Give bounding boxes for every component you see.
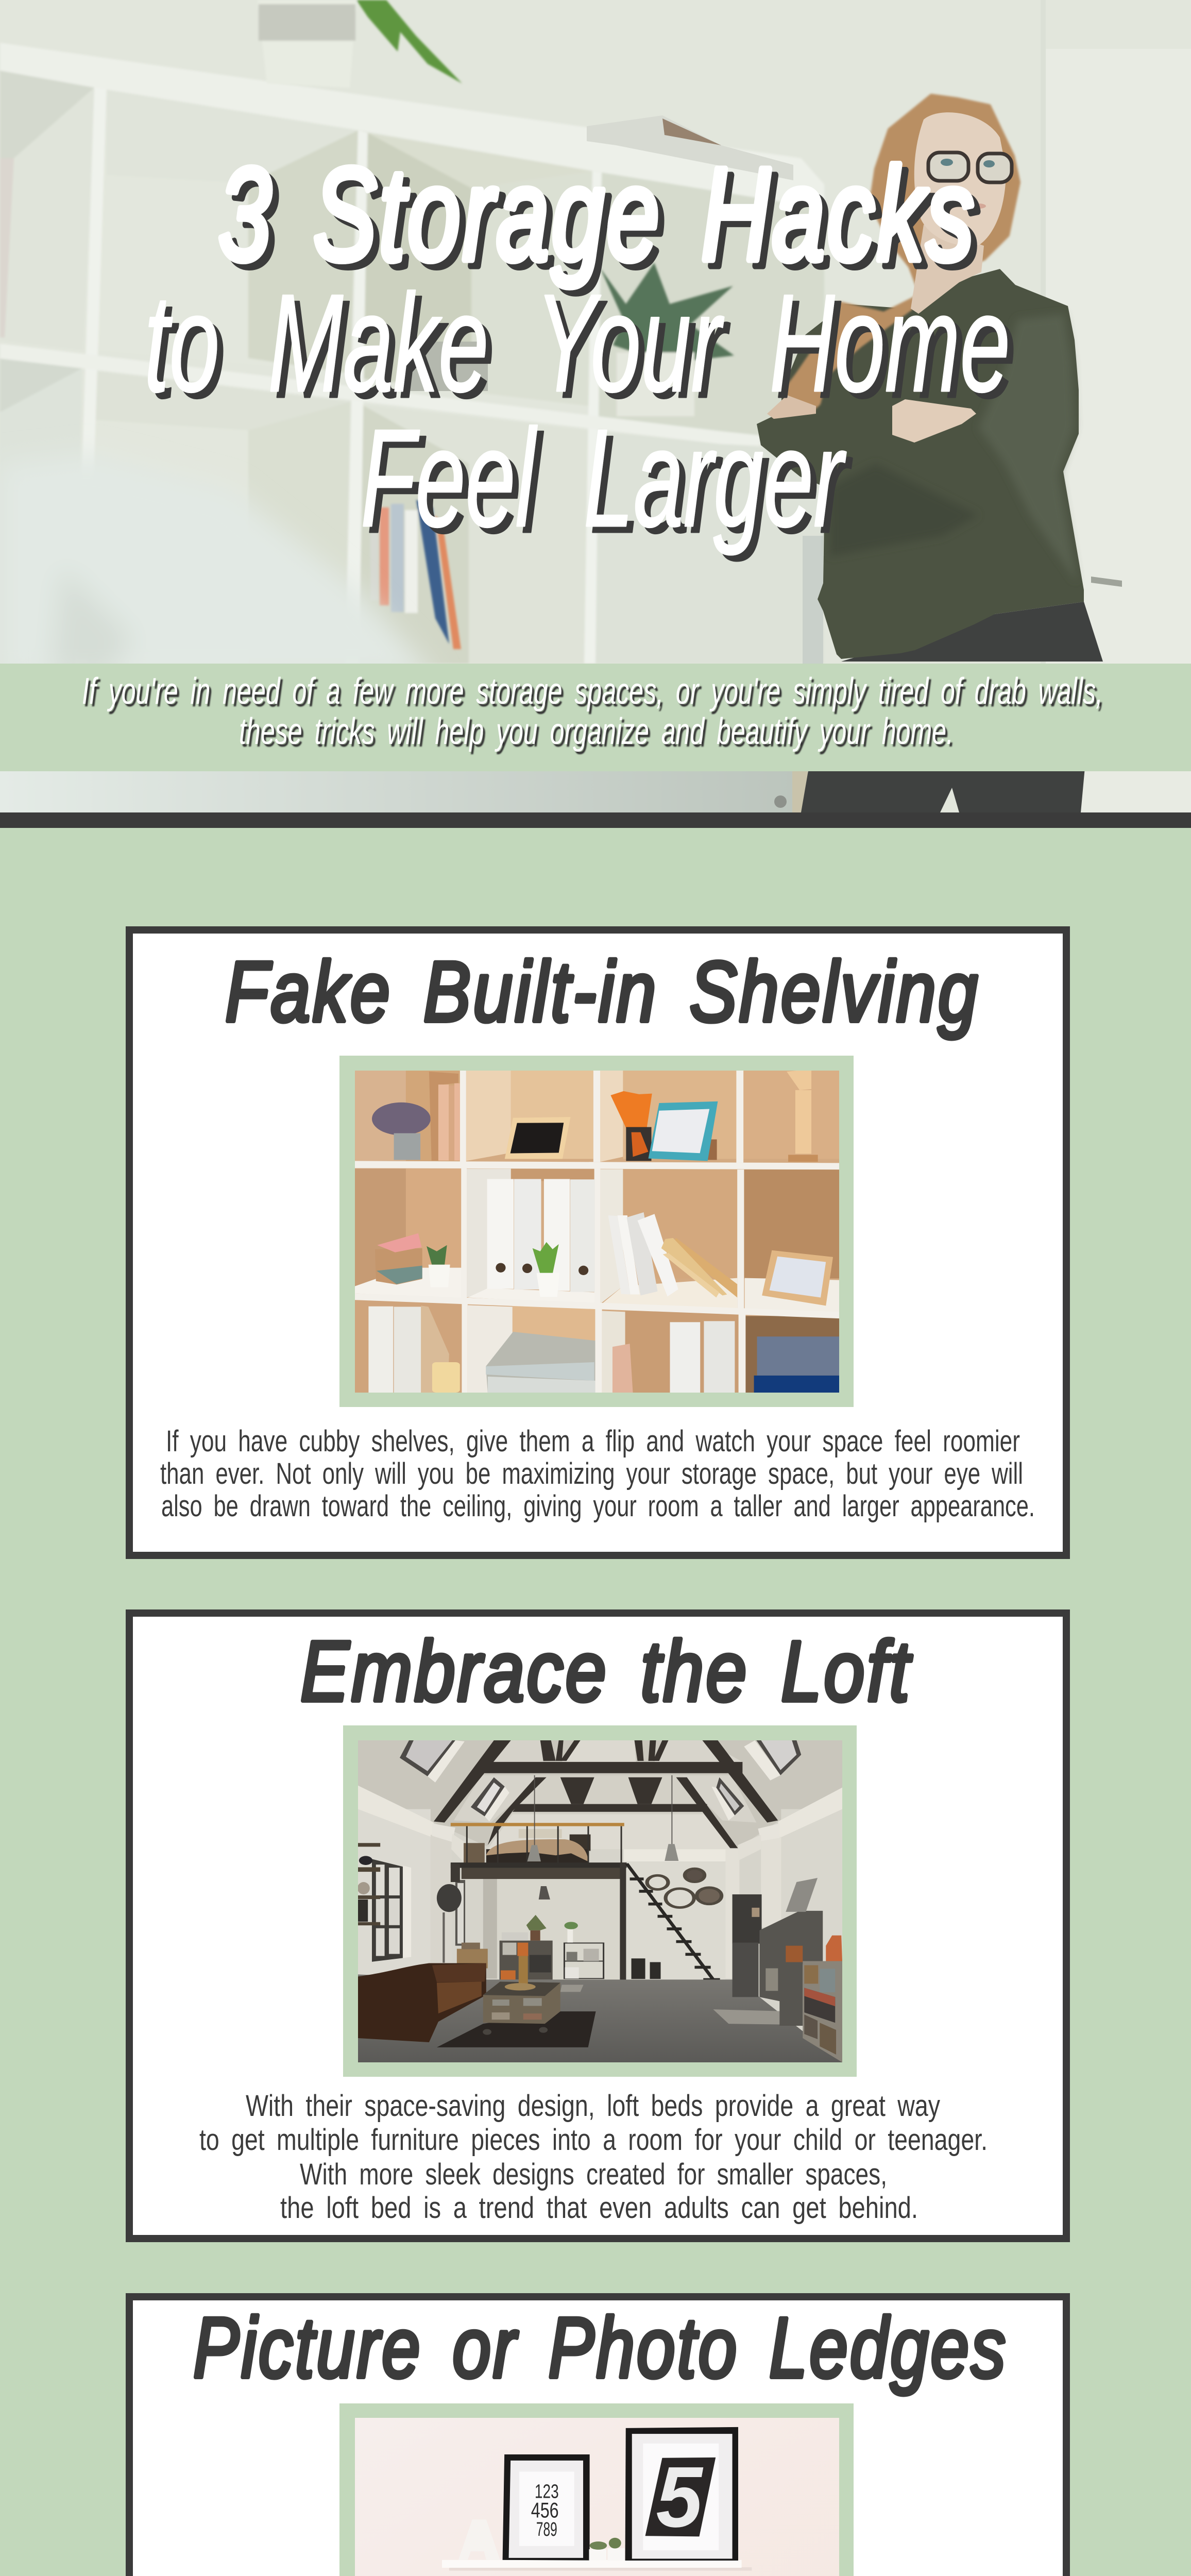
- panel: Picture or Photo Ledges: [129, 2297, 1066, 2576]
- body text: [160, 1425, 1035, 1523]
- upright books: [429, 1072, 460, 1161]
- body text: the loft bed is a trend that even adults can get behind.: [280, 2191, 918, 2225]
- frame with numbers: 123: [535, 2481, 559, 2502]
- intro band: [0, 664, 1191, 771]
- pallet table: [483, 1956, 560, 2035]
- frame with number 5: 5: [656, 2449, 704, 2545]
- sunlight on the floor: [560, 1985, 799, 2025]
- heading: Embrace the Loft: Embrace the Loft: [300, 1624, 912, 1719]
- left window: [372, 1859, 465, 1962]
- intro text: [82, 671, 1103, 752]
- pencil cup: [610, 1091, 652, 1161]
- lips: [972, 204, 986, 209]
- leather sofa: [358, 1963, 486, 2042]
- chalkboard frame: [505, 1117, 570, 1159]
- body text: With their space-saving design, loft beds provide a great way: [246, 2089, 940, 2123]
- main title: [144, 141, 1010, 556]
- white magazine files: [487, 1179, 595, 1297]
- skylights: [400, 1740, 801, 1821]
- photo frame: [339, 2403, 854, 2576]
- shirt: [757, 269, 1084, 659]
- studio lamp: [437, 1884, 462, 1963]
- frame with numbers: 789: [536, 2519, 557, 2540]
- ladder: [627, 1863, 724, 1994]
- blurred foreground foliage: [10, 459, 428, 664]
- face: [914, 112, 1006, 246]
- body text: With more sleek designs created for smaller spaces,: [300, 2158, 887, 2191]
- moulding and columns: [358, 1786, 842, 1978]
- hero photo: woman beside white shelving: [0, 0, 1191, 814]
- frame with numbers: [503, 2454, 590, 2561]
- shelving units: [457, 1915, 661, 1979]
- hanging lamps: [528, 1775, 678, 1900]
- grey box behind title: [400, 342, 488, 391]
- panel: Embrace the Loft: [129, 1613, 1066, 2239]
- rug: [437, 2011, 596, 2047]
- photo: cubby shelves: [355, 1071, 839, 1393]
- shelf boards: [355, 1071, 839, 1393]
- blue photo frame: [649, 1101, 718, 1161]
- panel: Fake Built-in Shelving: [129, 930, 1066, 1555]
- photo: loft interior: [358, 1740, 842, 2062]
- white and tan books: [608, 1212, 737, 1297]
- potted plant on the top shelf: [258, 0, 462, 88]
- main title: Feel Larger: [361, 401, 847, 556]
- lavender in a tin: [372, 1103, 431, 1160]
- neck and chest: [911, 225, 984, 314]
- photo: desk below photo ledge: [355, 2418, 839, 2576]
- body text: to get multiple furniture pieces into a room for your child or teenager.: [199, 2123, 988, 2157]
- wooden mannequin: [787, 1071, 818, 1162]
- boxes on the shelf: [587, 115, 793, 180]
- heading: Picture or Photo Ledges: Picture or Photo Ledges: [193, 2300, 1008, 2396]
- wall clocks: [647, 1869, 722, 1907]
- small plant: [427, 1245, 450, 1287]
- heading: Fake Built-in Shelving: Fake Built-in Shelving: [225, 944, 980, 1040]
- floor: [358, 1974, 842, 2062]
- roof beams: [434, 1740, 778, 1848]
- sticky-note holder: [375, 1233, 422, 1284]
- woman: [757, 96, 1103, 812]
- wooden picture frame: [762, 1250, 833, 1306]
- photo ledge: [442, 2560, 752, 2571]
- trunks of drawers: [803, 1961, 842, 2062]
- cacti: [589, 2538, 625, 2561]
- plant in shelf: [600, 263, 734, 416]
- trousers: [801, 602, 1103, 812]
- dark divider bar: [0, 812, 1191, 828]
- letter A: [458, 2519, 500, 2560]
- body text: [199, 2089, 988, 2225]
- glasses: [928, 152, 1012, 182]
- photo frame: [343, 1725, 857, 2077]
- frame with number 5: [625, 2427, 738, 2561]
- cabinet post and rod: [774, 536, 1122, 814]
- wall shelves: [358, 1843, 380, 1925]
- frame with numbers: 456: [531, 2499, 559, 2522]
- loft bed: [451, 1823, 627, 1995]
- photo frame: [339, 1056, 854, 1407]
- hair: [784, 96, 1018, 411]
- bottom row items: [368, 1306, 839, 1393]
- forearm and hand: [892, 399, 976, 443]
- books: [370, 500, 461, 649]
- right side furniture: [733, 1878, 842, 2026]
